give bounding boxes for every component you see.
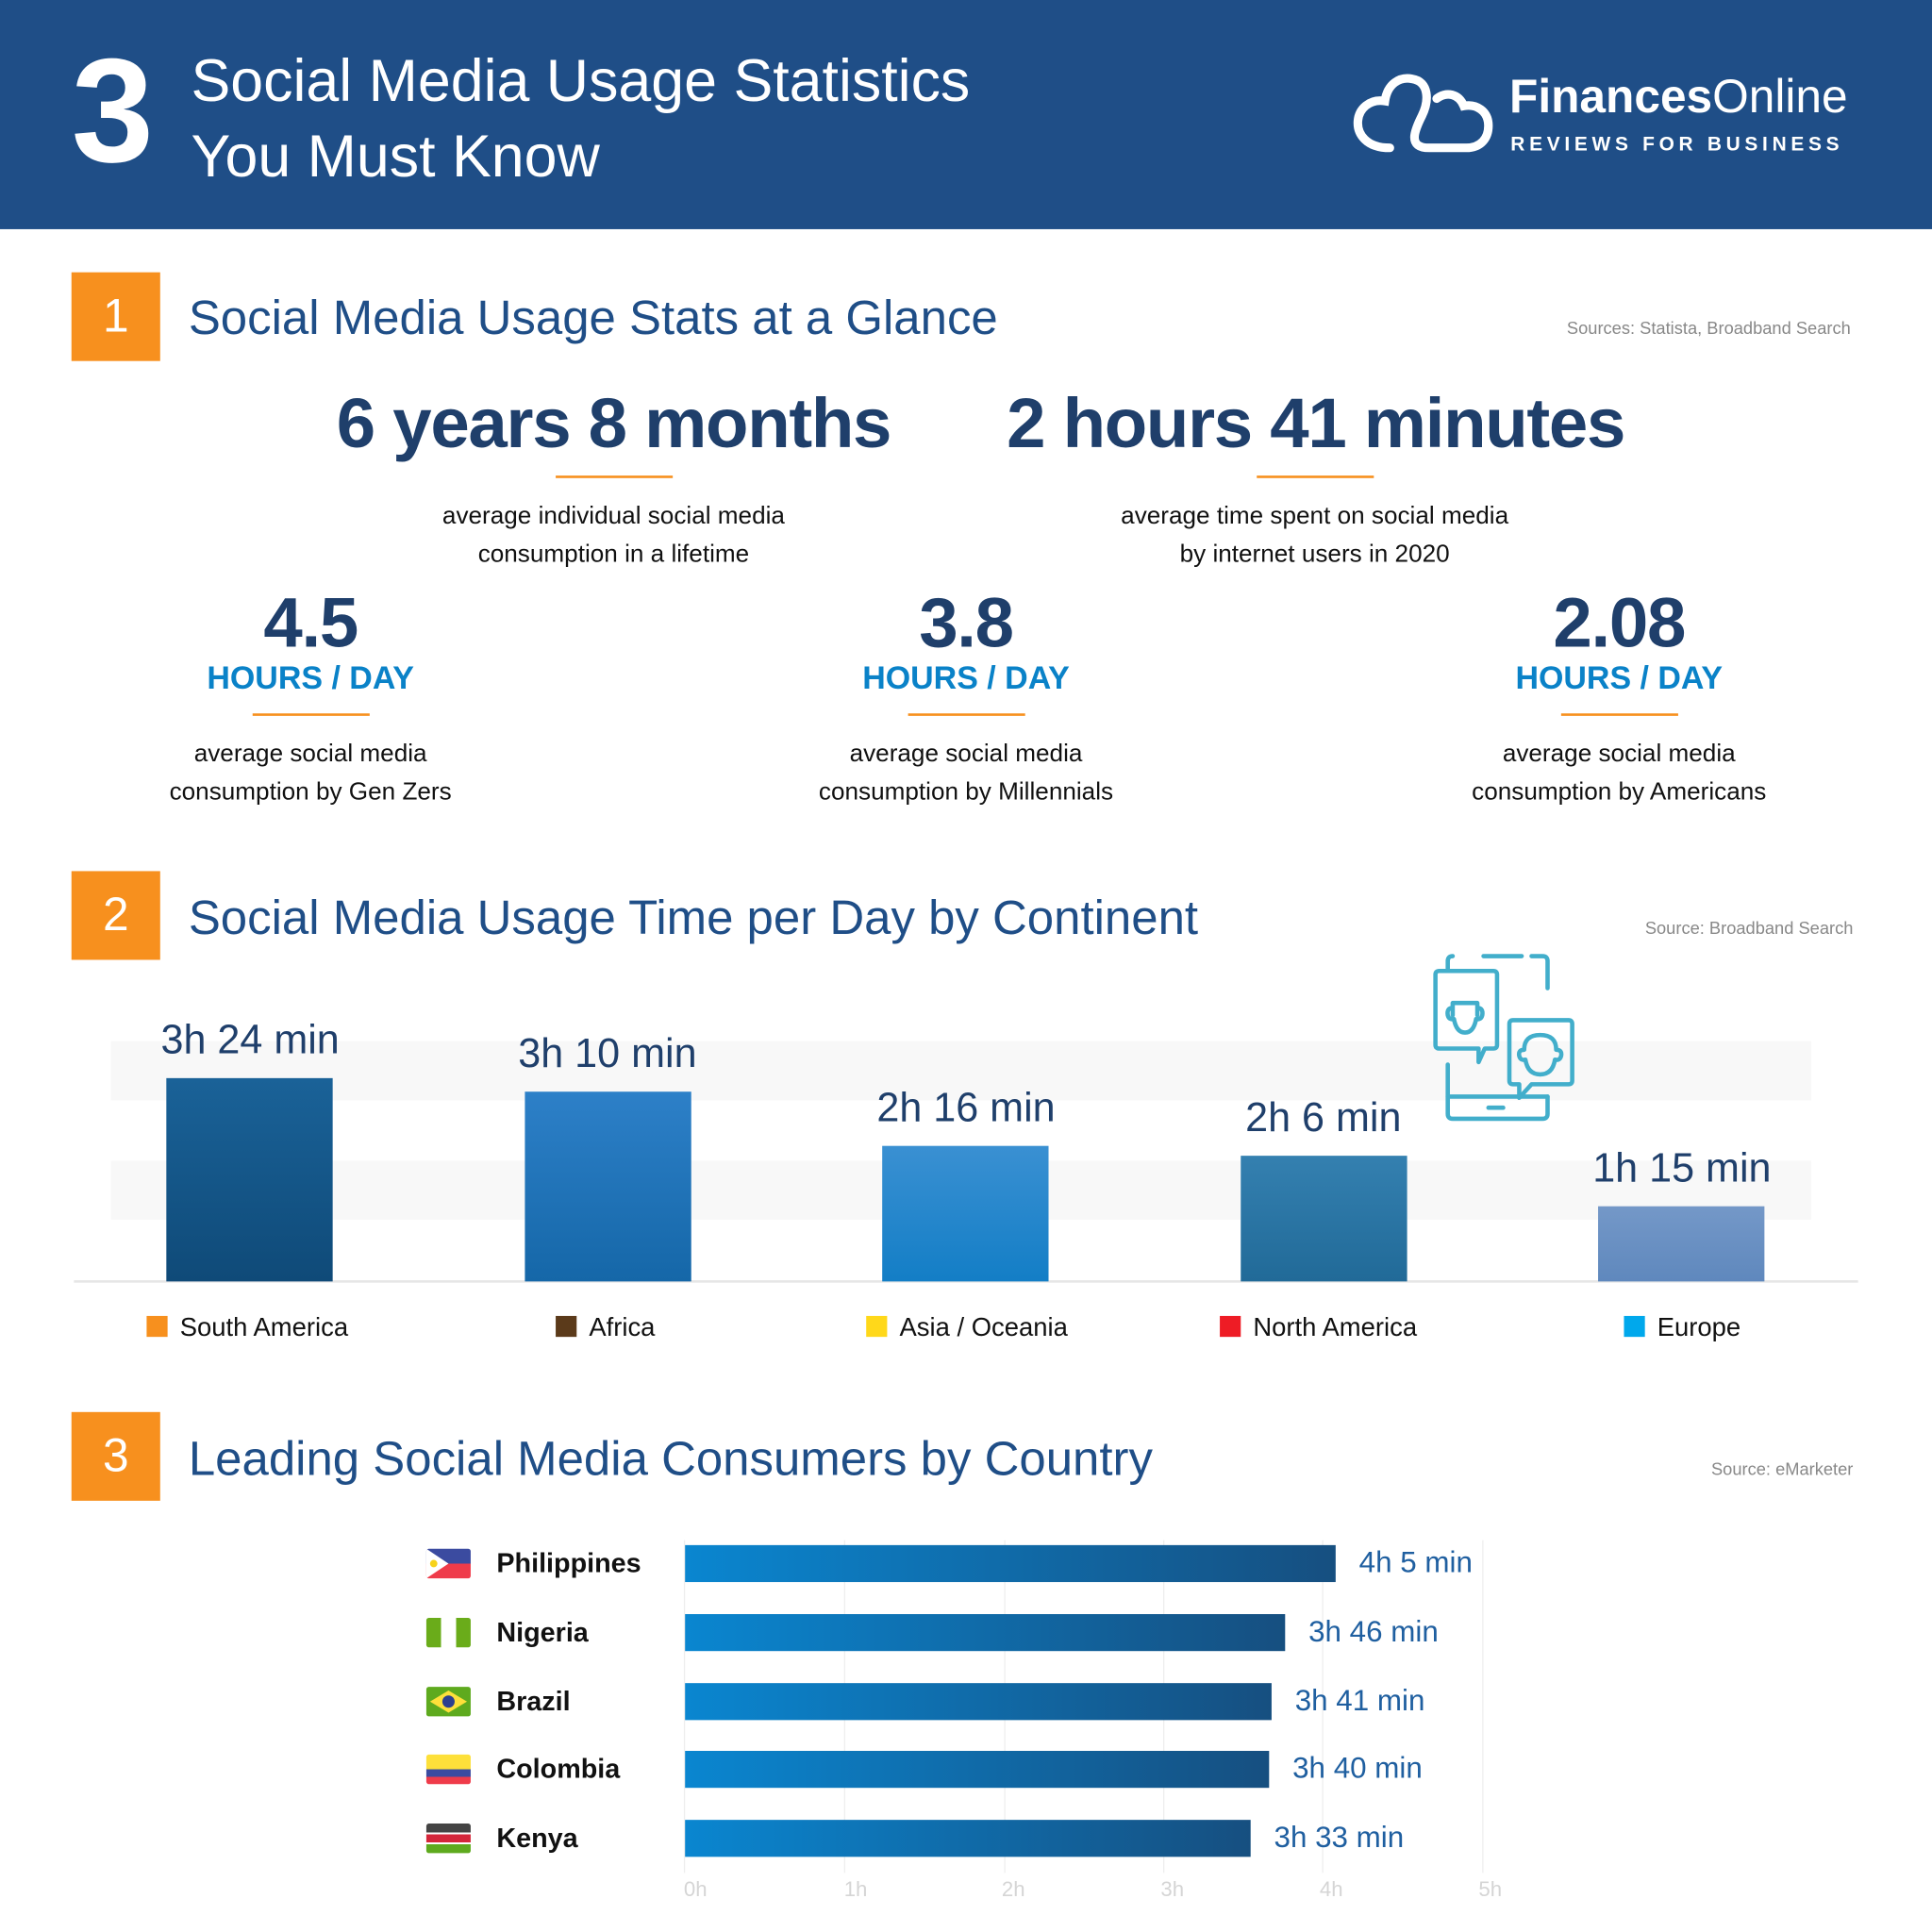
flag: Kenya bbox=[426, 1824, 471, 1853]
section 3 title: Leading Social Media Consumers by Country bbox=[189, 1433, 1153, 1486]
stat: Gen Z 4.5: consumption by Gen Zers bbox=[170, 778, 452, 806]
section 1 source: Sources: Statista, Broadband Search bbox=[1567, 318, 1851, 338]
bar: Colombia bbox=[685, 1751, 1269, 1788]
bar: North America bbox=[1241, 1156, 1407, 1281]
section 1 badge bbox=[72, 273, 160, 361]
flag: Colombia bbox=[426, 1755, 471, 1784]
stat: Millennials 3.8: average social media bbox=[850, 741, 1082, 768]
bar label Europe: 1h 15 min bbox=[1592, 1144, 1772, 1191]
flag: Nigeria bbox=[426, 1618, 471, 1647]
logo icon: cloud bbox=[1353, 74, 1492, 153]
bar label Asia: 2h 16 min bbox=[876, 1084, 1056, 1130]
country: Nigeria: Nigeria bbox=[496, 1617, 589, 1647]
axis labels: 1h bbox=[844, 1878, 867, 1901]
legend: South America: South America bbox=[180, 1313, 348, 1341]
stat: Americans 2.08: HOURS / DAY bbox=[1515, 659, 1723, 696]
section 1 title: Social Media Usage Stats at a Glance bbox=[189, 292, 998, 345]
stat: Millennials 3.8: 3.8 bbox=[919, 584, 1013, 663]
axis labels bbox=[684, 1878, 1502, 1901]
legend: North America: North America bbox=[1253, 1313, 1417, 1341]
stat: 2 hours 41 minutes: 2 hours 41 minutes bbox=[1007, 385, 1624, 463]
value: Nigeria: 3h 46 min bbox=[1308, 1615, 1439, 1649]
axis labels: 0h bbox=[684, 1878, 708, 1901]
icon: phone with chat faces bbox=[1433, 954, 1574, 1121]
legend: Africa: Africa bbox=[589, 1313, 655, 1341]
logo tagline: REVIEWS FOR BUSINESS bbox=[1510, 134, 1843, 156]
bar: Kenya bbox=[685, 1820, 1251, 1857]
header bbox=[0, 0, 1932, 229]
section 2 title: Social Media Usage Time per Day by Continent bbox=[189, 892, 1198, 945]
axis labels: 3h bbox=[1160, 1878, 1184, 1901]
title bbox=[191, 49, 970, 190]
bar: Africa bbox=[525, 1091, 691, 1281]
section 2 source: Source: Broadband Search bbox=[1645, 918, 1853, 938]
stat: 6 years 8 months: 6 years 8 months bbox=[337, 385, 891, 463]
stat: 6 years 8 months: consumption in a lifetime bbox=[478, 541, 749, 568]
legend: Asia / Oceania: Asia / Oceania bbox=[899, 1313, 1068, 1341]
bar: Brazil bbox=[685, 1683, 1272, 1720]
value: Philippines: 4h 5 min bbox=[1359, 1546, 1473, 1579]
bar: Asia/Oceania bbox=[882, 1146, 1049, 1281]
stat: 2 hours 41 minutes bbox=[1007, 385, 1624, 568]
bar label Africa: 3h 10 min bbox=[518, 1030, 697, 1075]
stat: 2 hours 41 minutes: average time spent on social media bbox=[1121, 503, 1508, 530]
bar label NA: 2h 6 min bbox=[1245, 1094, 1401, 1140]
value: Colombia: 3h 40 min bbox=[1292, 1752, 1423, 1786]
stat: Americans 2.08: 2.08 bbox=[1553, 584, 1685, 663]
stat: 6 years 8 months bbox=[337, 385, 891, 568]
big number 3: 3 bbox=[72, 28, 154, 193]
legend: Europe: Europe bbox=[1657, 1313, 1740, 1341]
bar: Nigeria bbox=[685, 1614, 1285, 1651]
legend: Africa bbox=[556, 1313, 655, 1341]
stat: Americans 2.08: consumption by Americans bbox=[1472, 778, 1766, 806]
country: Colombia: Colombia bbox=[496, 1754, 620, 1784]
flag: Brazil bbox=[426, 1687, 471, 1716]
stat: Gen Z 4.5: average social media bbox=[194, 741, 427, 768]
horizontal bar chart: countries bbox=[684, 1540, 1483, 1874]
logo text: FinancesOnline bbox=[1509, 72, 1848, 124]
country: Philippines: Philippines bbox=[496, 1547, 641, 1578]
axis labels: 5h bbox=[1478, 1878, 1502, 1901]
stat: Millennials 3.8 bbox=[819, 584, 1113, 806]
stat: Millennials 3.8: HOURS / DAY bbox=[862, 659, 1070, 696]
section 2 badge: 2 bbox=[103, 890, 129, 941]
country: Kenya: Kenya bbox=[496, 1823, 578, 1853]
axis labels: 2h bbox=[1002, 1878, 1025, 1901]
country: Brazil: Brazil bbox=[496, 1686, 571, 1716]
stat: 2 hours 41 minutes: by internet users in 2020 bbox=[1180, 541, 1450, 568]
stat: 6 years 8 months: average individual social media bbox=[442, 503, 785, 530]
stat: Gen Z 4.5: 4.5 bbox=[263, 584, 358, 663]
stat: Americans 2.08: average social media bbox=[1503, 741, 1736, 768]
flag: Philippines bbox=[426, 1549, 471, 1578]
stat: Gen Z 4.5 bbox=[170, 584, 452, 806]
value: Brazil: 3h 41 min bbox=[1295, 1684, 1424, 1718]
bar: Europe bbox=[1598, 1207, 1764, 1281]
bar chart: continents bbox=[74, 986, 1858, 1356]
value: Kenya: 3h 33 min bbox=[1274, 1821, 1404, 1855]
stat: Americans 2.08 bbox=[1472, 584, 1766, 806]
stat: Gen Z 4.5: HOURS / DAY bbox=[207, 659, 414, 696]
stat: Millennials 3.8: consumption by Millennials bbox=[819, 778, 1113, 806]
section 3 badge: 3 bbox=[103, 1430, 129, 1482]
bar label SA: 3h 24 min bbox=[160, 1017, 340, 1062]
section 3 badge bbox=[72, 1412, 160, 1501]
section 3 source: Source: eMarketer bbox=[1711, 1458, 1853, 1478]
section 1 badge: 1 bbox=[103, 291, 129, 342]
axis labels: 4h bbox=[1320, 1878, 1343, 1901]
title: Social Media Usage Statistics bbox=[191, 49, 970, 114]
section 2 badge bbox=[72, 871, 160, 959]
bar: South America bbox=[166, 1078, 333, 1281]
bar: Philippines bbox=[685, 1545, 1336, 1582]
title: You Must Know bbox=[191, 125, 600, 190]
